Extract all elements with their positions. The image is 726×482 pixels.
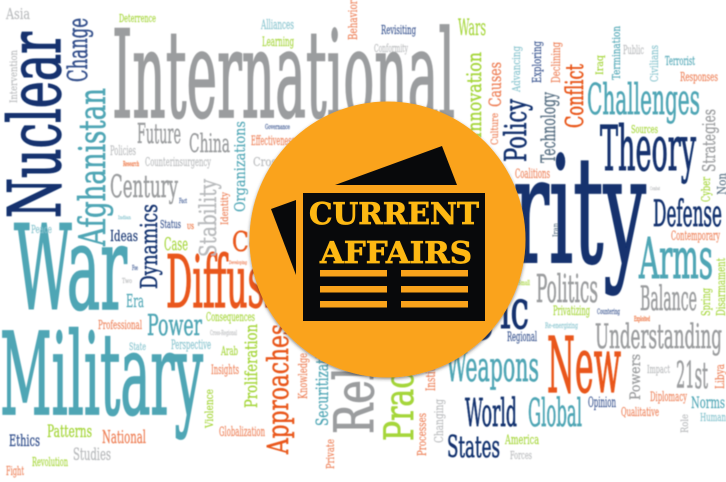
word: Fight: Fight: [6, 464, 24, 478]
word: Organizations: Organizations: [231, 121, 249, 212]
word: Policy: Policy: [499, 99, 534, 162]
word: Arab: Arab: [220, 344, 238, 358]
word: Iran: Iran: [552, 223, 560, 237]
word: Termination: Termination: [610, 26, 623, 80]
text lines left column: [320, 270, 387, 308]
word cloud: Global: [528, 391, 582, 435]
word: Developing: Developing: [229, 260, 247, 266]
word: Afghanistan: Afghanistan: [73, 88, 114, 247]
word: Century: Century: [110, 169, 178, 205]
word: Power: Power: [147, 308, 202, 342]
word: Declining: Declining: [549, 42, 563, 83]
word: Learning: Learning: [262, 35, 294, 50]
word: Public: Public: [623, 43, 644, 57]
word: Revisiting: Revisiting: [381, 23, 416, 37]
word: Patterns: Patterns: [47, 422, 92, 442]
word: Strategic: ic: [500, 278, 529, 341]
word: Dynamics: Dynamics: [137, 204, 163, 289]
word cloud: Future: [137, 119, 181, 150]
word: Professional: Professional: [98, 318, 142, 332]
word: Consequences: Consequences: [206, 310, 255, 324]
word: Conformity: Conformity: [374, 42, 408, 55]
text lines right column: [401, 270, 468, 308]
word: Proliferation: Proliferation: [242, 324, 262, 408]
heading: affairs: AFFAIRS: [319, 236, 472, 271]
word: Governance: Governance: [265, 124, 290, 131]
word: National: National: [102, 427, 146, 448]
word: Alliances: Alliances: [260, 18, 294, 33]
word: Knowledge: Knowledge: [296, 353, 310, 399]
word: Privatizing: Privatizing: [553, 304, 590, 319]
word: Changing: Changing: [432, 399, 446, 443]
word: Powers: Powers: [628, 354, 644, 400]
word: Forces: Forces: [510, 449, 532, 462]
word: State: State: [129, 342, 146, 353]
word: Opinion: Opinion: [588, 395, 616, 411]
word: Studies: Studies: [73, 445, 111, 465]
word: Relations: Relations: [323, 244, 386, 434]
word: Coalitions: Coalitions: [515, 167, 550, 182]
back sheet left: [271, 200, 296, 275]
word: Culture: Culture: [490, 113, 501, 145]
word cloud: New: [547, 322, 621, 411]
word: States: States: [447, 430, 500, 465]
word: Causes: Causes: [486, 62, 506, 107]
word: Ethics: Ethics: [9, 431, 40, 450]
word: Role: Role: [680, 414, 691, 433]
word: Cross-Regional: Cross-Regional: [210, 330, 237, 337]
word: Conflict: Conflict: [561, 64, 589, 128]
word: Innovation: Innovation: [462, 52, 486, 138]
word: Wars: Wars: [458, 16, 486, 41]
word: Fact: Fact: [179, 198, 187, 205]
word: Policies: Policies: [110, 144, 136, 159]
word: Countering: Countering: [597, 308, 620, 316]
word: Globalization: Globalization: [219, 425, 265, 440]
word: Exploited: Exploited: [634, 316, 650, 323]
word: Co: Co: [232, 227, 262, 258]
word cloud: Military: [0, 309, 203, 441]
word: Private: Private: [324, 439, 337, 469]
word: Re-energizing: Re-energizing: [545, 322, 578, 330]
word: Cross: Cross-: [253, 155, 285, 169]
word: Peace: Peace: [31, 223, 52, 236]
word: Technology: Technology: [536, 92, 560, 163]
word: Diplomacy: Diplomacy: [650, 390, 687, 405]
word cloud: Diffusion: [166, 240, 316, 324]
word: Spring: Spring: [699, 288, 713, 316]
word: Asia: Asia: [5, 5, 30, 23]
word: Combat: Combat: [650, 186, 660, 192]
back sheet top: [335, 146, 457, 185]
word: Practice: Practice: [377, 316, 423, 441]
word: Violence: Violence: [203, 389, 216, 429]
word: Identity: Identity: [220, 192, 231, 225]
heading: current: CURRENT: [309, 197, 480, 232]
word: Processes: Processes: [415, 413, 429, 456]
word: Case: Case: [164, 234, 188, 255]
word: US: US: [187, 224, 194, 231]
word: Approaches: Approaches: [261, 324, 295, 455]
word: Perspective: Perspective: [171, 338, 211, 353]
word: Exploring: Exploring: [530, 41, 544, 83]
word: Two: Two: [122, 278, 132, 285]
word: China: China: [189, 129, 230, 158]
word: Intervention: Intervention: [9, 50, 20, 103]
word: Regional: Regional: [507, 330, 537, 345]
word: Qualitative: Qualitative: [621, 405, 659, 419]
word: Era: Era: [126, 291, 144, 312]
word: Counterinsurgency: Counterinsurgency: [145, 155, 211, 169]
word: Sources: Sources: [631, 123, 658, 136]
word: Strategies: Strategies: [699, 109, 720, 172]
word: Ideas: Ideas: [110, 227, 138, 245]
word: Weapons: Weapons: [446, 343, 539, 391]
front page: [303, 193, 485, 321]
word: Insights: Insights: [211, 363, 239, 378]
word: Institutions: Institutions: [424, 341, 439, 391]
word: America: America: [504, 433, 539, 448]
word: Cyber: Cyber: [699, 177, 713, 202]
word: Strategic: Strateg: [320, 278, 497, 341]
word: Research: Research: [123, 161, 139, 168]
word: Deterrence: Deterrence: [119, 12, 156, 25]
word cloud: World: [465, 391, 517, 435]
word: Small: Small: [518, 280, 530, 287]
word cloud: War: [14, 200, 127, 337]
word: Effectiveness: Effectiveness: [251, 134, 295, 149]
word: Stability: Stability: [196, 179, 222, 257]
word: Status: Status: [160, 218, 181, 231]
word: Civilians: Civilians: [648, 45, 661, 82]
word: Foe: Foe: [132, 265, 138, 272]
word: Revolution: Revolution: [32, 455, 68, 469]
word: Securitization: Securitization: [313, 340, 333, 426]
badge: current affairs: [250, 102, 526, 378]
icon: newspaper: [271, 146, 485, 321]
word: Security: Secu: [360, 125, 510, 297]
word: Impact: Impact: [647, 363, 670, 376]
word: Indian: Indian: [118, 215, 132, 221]
word: Iraq: Iraq: [595, 54, 606, 75]
word: Advancing: Advancing: [510, 46, 523, 93]
word: Terrorist: Terrorist: [665, 54, 695, 68]
word cloud: Politics: [536, 267, 598, 311]
orange circle: [250, 102, 526, 378]
